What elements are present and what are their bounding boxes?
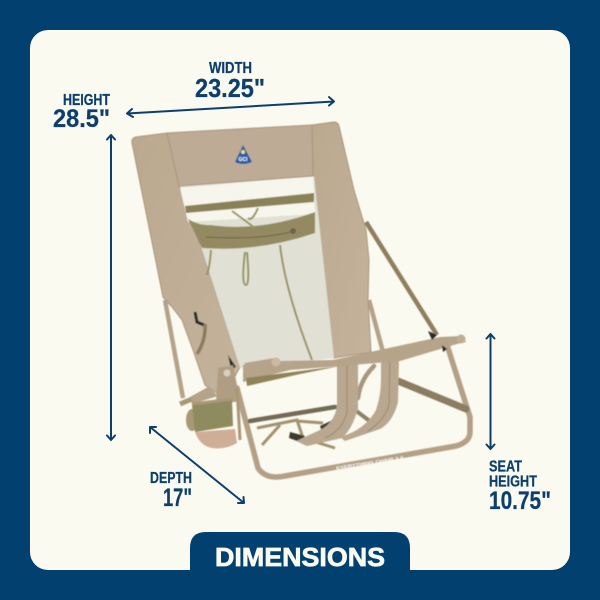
chair mesh	[180, 176, 334, 368]
chair rear brace	[366, 222, 437, 335]
chair logo: GCI	[239, 157, 248, 163]
chair mesh trims	[207, 208, 312, 360]
label: height: 28.5"	[53, 105, 110, 133]
chair white gap	[180, 176, 315, 222]
label: height: HEIGHT	[63, 92, 110, 109]
chair seat	[243, 336, 466, 382]
label: depth: 17"	[163, 484, 192, 512]
chair shoulder straps	[296, 360, 399, 446]
chair buckles	[289, 418, 338, 442]
chair	[132, 122, 470, 477]
chair logo	[235, 145, 252, 164]
chair side clip and strap	[195, 312, 204, 325]
chair back legs	[165, 300, 383, 398]
arrow: height	[107, 135, 115, 440]
label: seat height: HEIGHT	[489, 474, 537, 490]
label: depth	[150, 470, 192, 512]
label: depth: DEPTH	[150, 470, 192, 487]
chair webbing	[257, 420, 335, 448]
label: height	[53, 92, 110, 133]
label: width	[195, 60, 265, 103]
label: seat height: 10.75"	[489, 487, 551, 515]
label: seat height	[489, 458, 551, 515]
chair model label: EVERYTHING CHAIR 2.0	[336, 455, 405, 470]
label: width: WIDTH	[209, 60, 252, 77]
arrow: width	[127, 97, 334, 117]
label: seat height: SEAT	[489, 458, 522, 476]
title tab	[190, 532, 410, 572]
chair seat pegs	[245, 334, 466, 366]
arrow: depth	[150, 427, 244, 503]
chair side joints	[228, 331, 447, 369]
label: width: 23.25"	[195, 73, 265, 103]
chair frame	[237, 345, 470, 477]
chair pocket band	[188, 212, 315, 249]
chair backrest side panels	[132, 122, 371, 394]
chair top panel	[167, 125, 313, 186]
arrow: seat height	[486, 334, 494, 449]
chair cup holder	[180, 365, 240, 448]
chair olive band	[185, 193, 314, 213]
title: DIMENSIONS	[215, 542, 385, 572]
